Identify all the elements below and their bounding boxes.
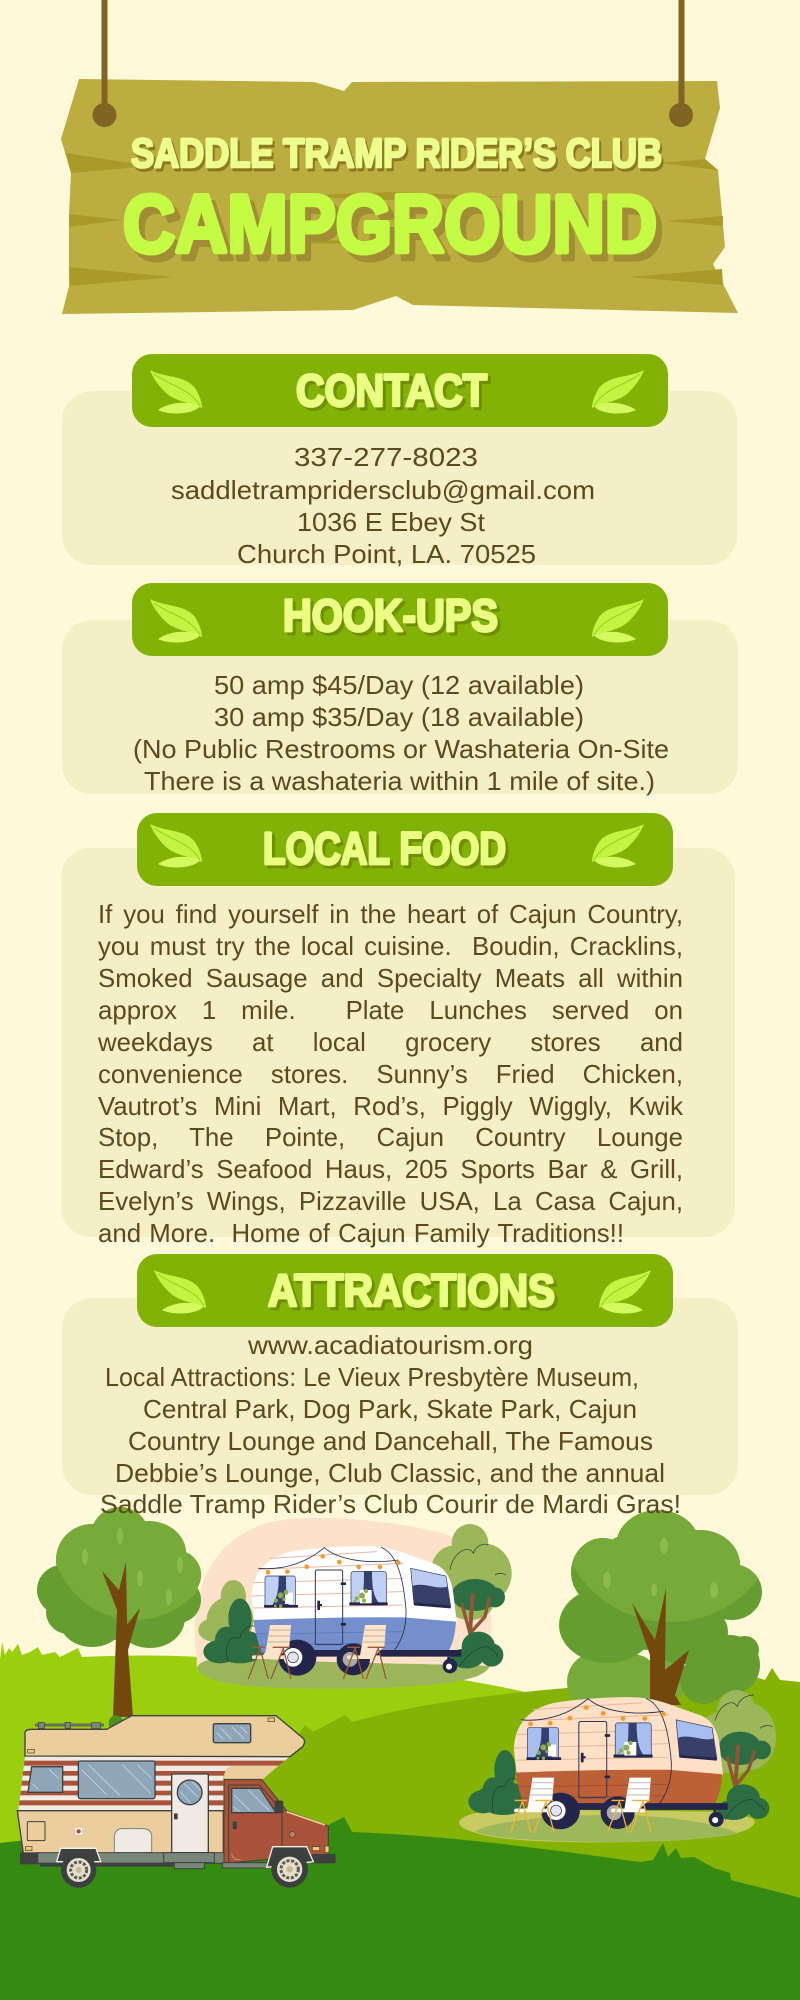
inlet: [75, 1827, 83, 1835]
icon: leaf left: [150, 599, 202, 642]
icon: leaf left: [150, 824, 202, 867]
illustration: blue camper trailer: [195, 1518, 512, 1689]
attractions text: www.acadiatourism.org: [247, 1330, 533, 1360]
tree foliage and trunk: [718, 1732, 771, 1788]
illustration: left tree: [37, 1507, 201, 1717]
siding lines: [514, 1703, 669, 1760]
heading: LOCAL FOOD: [263, 823, 506, 874]
main window: [78, 1761, 155, 1799]
window left: [264, 1576, 298, 1608]
dark green hill: [0, 1817, 800, 2000]
back bushes: [198, 1524, 512, 1643]
sign board: [61, 79, 738, 314]
heading: CONTACT: [296, 365, 487, 416]
local food paragraph: Vautrot’s Mini Mart, Rod’s, Piggly Wiggly, Kwik: [98, 1093, 683, 1121]
rear window: [676, 1720, 717, 1759]
roof window: [213, 1724, 251, 1743]
medium green hill: [230, 1668, 800, 1910]
local food paragraph: Smoked Sausage and Specialty Meats all within: [98, 965, 683, 993]
storage door: [27, 1822, 45, 1841]
wood grain marks: [66, 153, 723, 286]
window right: [349, 1571, 388, 1605]
local food paragraph: [98, 901, 683, 1248]
heading bar: attractions: [137, 1254, 673, 1327]
wheels: [541, 1793, 724, 1829]
peach backdrop: [195, 1518, 492, 1667]
small bush behind: [109, 1715, 123, 1731]
local food paragraph: Evelyn’s Wings, Pizzaville USA, La Casa Cajun,: [98, 1188, 683, 1216]
illustration: right tree: [559, 1510, 762, 1705]
wheels: [278, 1640, 457, 1676]
hook-ups text: 30 amp $35/Day (18 available): [214, 702, 584, 732]
chair left: [248, 1625, 291, 1679]
lower body: [17, 1811, 223, 1853]
light green hill: [0, 1642, 525, 1900]
sign title: CAMPGROUND: [123, 179, 657, 270]
panel background: [62, 1298, 738, 1495]
cab-over top: [25, 1716, 305, 1757]
panel: local food: [61, 813, 735, 1237]
rear window: [411, 1568, 451, 1607]
rope left: [92, 0, 116, 127]
hills background: [0, 1642, 800, 2000]
local food paragraph: Stop, The Pointe, Cajun Country Lounge: [98, 1124, 683, 1152]
trailer body: [252, 1546, 457, 1652]
attractions text: Country Lounge and Dancehall, The Famous: [128, 1426, 653, 1456]
door: [172, 1774, 208, 1853]
marker lights: [25, 1718, 329, 1853]
window right: [614, 1723, 653, 1758]
local food paragraph: convenience stores. Sunny’s Fried Chicken,: [98, 1061, 683, 1089]
heading bar: hook-ups: [132, 583, 668, 656]
heading bar: local food: [137, 813, 673, 886]
icon: leaf left: [154, 1270, 206, 1313]
trailer curve line: [646, 1698, 671, 1805]
local food paragraph: you must try the local cuisine. Boudin, Cracklins,: [98, 933, 683, 961]
hook-ups text: (No Public Restrooms or Washateria On-Site: [133, 734, 669, 764]
rope right: [669, 0, 693, 127]
chassis: [571, 1803, 728, 1810]
trailer body: [514, 1697, 723, 1805]
attractions text: Local Attractions: Le Vieux Presbytère Museum,: [105, 1362, 639, 1392]
hanging wooden sign: [61, 0, 738, 314]
cab overhang: [224, 1766, 278, 1779]
attractions text: Central Park, Dog Park, Skate Park, Cajun: [143, 1394, 637, 1424]
contact text: Church Point, LA. 70525: [237, 539, 536, 569]
tree foliage and trunk: [452, 1579, 505, 1634]
trailer lower band: [516, 1770, 722, 1806]
sign subtitle: SADDLE TRAMP RIDER’S CLUB: [131, 130, 662, 176]
trailer curve line: [381, 1547, 406, 1652]
icon: leaf right: [592, 824, 644, 867]
string lights: [258, 1548, 401, 1575]
trunk: [102, 1562, 140, 1717]
panel background: [62, 620, 738, 794]
ground: [459, 1809, 755, 1842]
contact text: saddletrampridersclub@gmail.com: [171, 475, 595, 505]
skirt and bumpers: [20, 1852, 336, 1869]
local food paragraph: Edward’s Seafood Haus, 205 Sports Bar & Grill,: [98, 1156, 683, 1184]
contact text: 1036 E Ebey St: [297, 507, 486, 537]
trunk: [632, 1588, 689, 1705]
illustration: motorhome RV: [13, 1715, 336, 1888]
chassis: [307, 1650, 461, 1657]
roof rack: [36, 1722, 103, 1729]
panel: contact: [62, 354, 737, 569]
back bushes: [697, 1690, 776, 1773]
illustration: orange camper trailer: [459, 1690, 776, 1842]
heading bar: contact: [132, 354, 668, 427]
panel background: [61, 848, 735, 1237]
attractions text: Saddle Tramp Rider’s Club Courir de Mardi Gras!: [100, 1489, 681, 1519]
cab: [224, 1779, 328, 1863]
hook-ups text: There is a washateria within 1 mile of site.): [144, 766, 655, 796]
hatch: [114, 1829, 152, 1853]
ground: [197, 1658, 490, 1689]
contact text: [171, 442, 595, 569]
wheel arches: [57, 1847, 313, 1867]
contact text: 337-277-8023: [294, 442, 478, 472]
door: [315, 1570, 346, 1645]
hook-ups text: 50 amp $45/Day (12 available): [214, 670, 584, 700]
crown: [559, 1510, 762, 1664]
chair right: [343, 1625, 386, 1679]
local food paragraph: weekdays at local grocery stores and: [98, 1029, 683, 1057]
chair left: [510, 1778, 554, 1833]
door: [579, 1722, 610, 1798]
panel background: [62, 391, 737, 565]
icon: leaf right: [592, 599, 644, 642]
back bushes: [567, 1652, 687, 1712]
icon: leaf right: [592, 370, 644, 413]
trailer lower band: [253, 1617, 456, 1653]
window left: [526, 1728, 561, 1760]
panel: hook-ups: [62, 583, 738, 796]
front bushes: [203, 1598, 503, 1668]
rear side window: [28, 1767, 63, 1792]
siding lines: [252, 1552, 403, 1608]
attractions text: [100, 1330, 681, 1519]
heading: ATTRACTIONS: [268, 1265, 555, 1316]
attractions text: Debbie’s Lounge, Club Classic, and the annual: [115, 1458, 665, 1488]
hook-ups text: [133, 670, 669, 796]
striped middle section: [13, 1757, 290, 1810]
local food paragraph: and More. Home of Cajun Family Traditions!!: [98, 1220, 624, 1248]
chair right: [607, 1778, 651, 1833]
panel: attractions: [62, 1254, 738, 1495]
string lights: [521, 1699, 666, 1726]
crown: [37, 1507, 201, 1648]
local food paragraph: If you find yourself in the heart of Cajun Country,: [98, 901, 683, 929]
heading: HOOK-UPS: [283, 590, 498, 641]
icon: leaf right: [599, 1270, 651, 1313]
icon: leaf left: [150, 370, 202, 413]
trailer: [510, 1697, 728, 1833]
bushes: [468, 1750, 769, 1820]
wheels: [61, 1851, 308, 1888]
local food paragraph: approx 1 mile. Plate Lunches served on: [98, 997, 683, 1025]
